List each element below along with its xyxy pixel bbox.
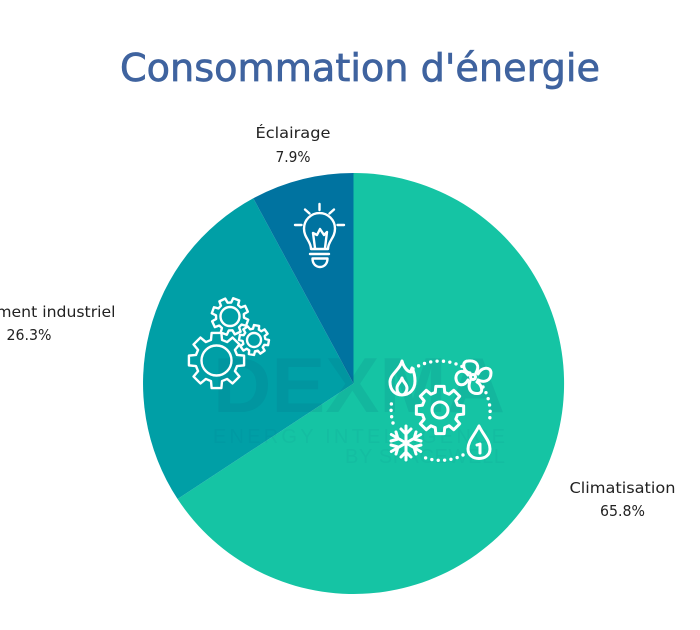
watermark: ENERGY INTELLIGENCE	[213, 426, 505, 448]
fan	[456, 361, 491, 394]
pie chart	[143, 173, 564, 594]
slice: Éclairage 7.9%	[253, 173, 354, 384]
watermark: BY SPACEWELL	[345, 446, 505, 468]
watermark	[213, 341, 505, 468]
flame	[390, 361, 415, 395]
icon: gears	[189, 293, 271, 388]
label: Climatisation: Climatisation	[570, 479, 676, 497]
droplet	[468, 426, 490, 458]
label: Éclairage: 7.9%	[276, 148, 310, 166]
watermark: DEXMA	[213, 341, 505, 429]
label: Éclairage: Éclairage	[256, 123, 330, 142]
label: Éclairage	[256, 123, 330, 166]
title: Consommation d'énergie	[120, 46, 600, 90]
dotted ring	[391, 361, 490, 460]
label: Climatisation	[570, 479, 676, 520]
label: Climatisation: 65.8%	[600, 502, 645, 520]
label: Équipement industriel	[0, 302, 116, 344]
label: Équipement industriel: 26.3%	[6, 326, 52, 344]
slice: Climatisation 65.8%	[178, 173, 564, 594]
slice: Équipement industriel 26.3%	[143, 198, 354, 499]
icon: light bulb	[295, 204, 344, 267]
snowflake	[391, 426, 421, 460]
icon: climate system	[390, 361, 491, 460]
central gear	[416, 386, 464, 434]
